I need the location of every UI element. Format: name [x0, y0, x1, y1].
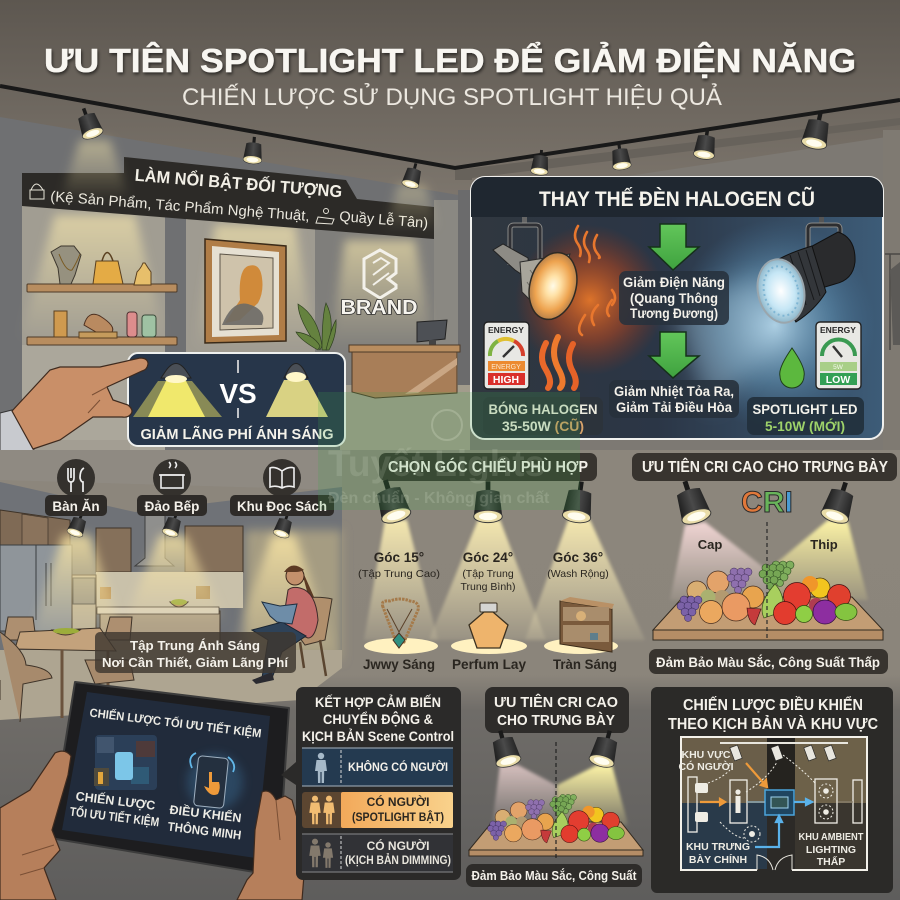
icon: display shelf [560, 597, 614, 652]
beam labels: (Tập Trung Cao) [358, 568, 440, 580]
panel: prioritise high CRI: Thip [810, 537, 838, 552]
energy card: high [484, 322, 529, 389]
floor plan labels: KHU TRƯNG [686, 841, 750, 853]
state: occupied, dimming: CÓ NGƯỜI [367, 838, 429, 853]
panel: reduce wasted light: GIẢM LÃNG PHÍ ÁNH SÁNG [140, 425, 334, 443]
tablet with saving strategy: CHIẾN LƯỢC TỐI ƯU TIẾT KIỆM [89, 705, 262, 741]
callout: reduced power: Giảm Điện Năng [623, 275, 725, 290]
callout: focus light where needed [95, 632, 296, 673]
floor plan labels: THẤP [817, 855, 845, 868]
title: ƯU TIÊN SPOTLIGHT LED ĐỂ GIẢM ĐIỆN NĂNG [44, 42, 856, 79]
icon: necklace [382, 599, 418, 648]
label: halogen bulb: BÓNG HALOGEN [488, 400, 598, 417]
energy card: low: ENERGY [820, 325, 856, 335]
plant [296, 303, 336, 350]
icon: LED spotlight [752, 217, 855, 327]
callout: reduced power [619, 271, 729, 325]
panel: control strategy by scene and zone: CHIẾN LƯỢC ĐIỀU KHIỂN [683, 696, 863, 714]
icon: reception bell [316, 208, 334, 224]
small display table [469, 822, 643, 856]
energy card: low: LOW [826, 374, 850, 386]
zone spot lamps [66, 511, 295, 540]
item captions: Tràn Sáng [553, 656, 617, 672]
spotlights [371, 476, 596, 526]
icon: smartphone control [187, 753, 243, 810]
banner: highlight objects: (Kệ Sản Phẩm, Tác Phẩm Nghệ Thuật, [50, 189, 310, 225]
watermark: Tuyết Lights [328, 443, 545, 484]
caption [466, 864, 642, 887]
framed artwork [205, 239, 286, 343]
wide beam lamp [133, 364, 222, 417]
beam labels [358, 550, 609, 593]
banner: highlight objects: LÀM NỔI BẬT ĐỐI TƯỢNG [134, 165, 343, 201]
reception desk [349, 320, 460, 398]
panel: control strategy by scene and zone [651, 687, 893, 893]
panel: replace old halogen lamps [471, 177, 883, 439]
tablet with saving strategy: THÔNG MINH [167, 819, 242, 842]
item captions: Perfum Lay [452, 656, 526, 672]
reader in chair [252, 565, 332, 684]
dining table and chairs [0, 617, 134, 722]
green arrow down: saves power [649, 224, 699, 270]
callout: focus light where needed: Tập Trung Ánh Sáng [130, 638, 260, 653]
panel: sensors and scene control: KỊCH BẢN Scene Control [302, 728, 454, 744]
icon: green drop [780, 348, 804, 388]
icon: strategy dashboard [94, 735, 157, 790]
icon: halogen lamp [493, 217, 584, 325]
kitchen furniture [0, 510, 243, 651]
floor plan labels: LIGHTING [806, 844, 856, 856]
floor plan labels: CÓ NGƯỜI [678, 760, 734, 773]
item captions [363, 656, 617, 672]
tablet with saving strategy: CHIẾN LƯỢC [75, 788, 156, 813]
floor plan labels: KHU AMBIENT [798, 831, 864, 843]
tablet with saving strategy [50, 682, 289, 876]
zone: dining table [45, 459, 107, 516]
caption [649, 649, 888, 674]
icon: store [30, 184, 44, 199]
shelves [27, 246, 177, 345]
state: occupied, spotlight on: (SPOTLIGHT BẬT) [352, 809, 444, 824]
callout: reduced heat [609, 380, 739, 418]
panel: choose beam angle: CHỌN GÓC CHIẾU PHÙ HỢP [388, 458, 588, 476]
flow arrows [700, 763, 853, 847]
panel: sensors and scene control: CHUYỂN ĐỘNG & [323, 710, 433, 727]
CRI badge: CRI [741, 486, 793, 519]
brand logo [340, 250, 418, 319]
tablet with saving strategy: TỐI ƯU TIẾT KIỆM [69, 804, 160, 829]
banner: highlight objects [22, 157, 434, 239]
callout: reduced heat: Giảm Tải Điều Hòa [616, 400, 732, 415]
icon: heat waves near lamp [575, 226, 615, 335]
display table [653, 597, 883, 640]
panel: reduce wasted light: VS [219, 378, 257, 409]
floor plan [681, 737, 867, 870]
track with ceiling spotlights [0, 86, 900, 232]
icon: perfume bottle [469, 603, 508, 648]
energy card: low [816, 322, 861, 389]
state: no one: KHÔNG CÓ NGƯỜI [348, 759, 448, 774]
watermark [318, 392, 580, 510]
caption: Đảm Bảo Màu Sắc, Công Suất [472, 868, 637, 883]
icon: big heat flames [542, 337, 576, 388]
panel: control strategy by scene and zone: THEO KỊCH BẢN VÀ KHU VỰC [668, 716, 878, 733]
icon: right hand [237, 791, 306, 900]
scene: kitchen and reading zones [0, 450, 342, 722]
beam labels: Góc 15° [374, 550, 424, 565]
panel: choose beam angle [358, 453, 645, 672]
panel: CRI display, smaller: CHO TRƯNG BÀY [497, 712, 615, 729]
callout: reduced heat: Giảm Nhiệt Tỏa Ra, [614, 384, 734, 399]
watermark: Đèn chuẩn - Không gian chất [328, 489, 550, 507]
zone: dining table: Bàn Ăn [52, 499, 100, 514]
state: occupied, spotlight on [302, 792, 453, 828]
panel: CRI display, smaller [466, 687, 643, 887]
zone: reading area: Khu Đọc Sách [237, 499, 327, 514]
item captions: Jwwy Sáng [363, 656, 435, 672]
banner: highlight objects: Quầy Lễ Tân) [339, 208, 429, 232]
label: halogen bulb [483, 397, 603, 435]
floor plan labels: KHU VỰC [682, 749, 731, 761]
label: LED spotlight: SPOTLIGHT LED [752, 401, 858, 417]
beam labels: (Tập Trung [462, 568, 514, 580]
panel: reduce wasted light [128, 353, 345, 446]
zone: kitchen island: Đảo Bếp [145, 499, 199, 514]
state: occupied, dimming: (KỊCH BẢN DIMMING) [345, 852, 451, 867]
zone: kitchen island [137, 459, 207, 516]
state: occupied, dimming [302, 834, 453, 872]
narrow beam lamp [266, 364, 328, 417]
icon: left hand [0, 751, 71, 900]
beam labels: Trung Bình) [460, 581, 516, 593]
floor plan labels: BÀY CHÍNH [689, 853, 747, 866]
state: no one [302, 748, 453, 786]
green arrow down: less heat [649, 332, 699, 378]
icon: pointing hand [0, 358, 148, 472]
energy card: high: ENERGY [491, 364, 521, 371]
subtitle: CHIẾN LƯỢC SỬ DỤNG SPOTLIGHT HIỆU QUẢ [182, 82, 722, 111]
beam labels: (Wash Rộng) [547, 568, 609, 580]
beam labels: Góc 36° [553, 550, 603, 565]
panel: prioritise high CRI: Cap [698, 537, 722, 552]
state: occupied, spotlight on: CÓ NGƯỜI [367, 794, 429, 809]
label: halogen bulb: 35-50W (CŨ) [502, 417, 584, 434]
beam labels: Góc 24° [463, 550, 513, 565]
label: LED spotlight [747, 397, 864, 435]
panel: prioritise high CRI [632, 453, 897, 674]
panel: sensors and scene control: KẾT HỢP CẢM BIẾN [315, 694, 441, 710]
label: LED spotlight: 5-10W (MỚI) [765, 417, 845, 434]
callout: reduced power: Tương Đương) [630, 306, 718, 321]
brand logo: BRAND [340, 297, 418, 319]
scene: product, art and brand wall [0, 117, 470, 452]
light pools [364, 638, 618, 654]
panel: sensors and scene control [281, 687, 461, 880]
callout: reduced power: (Quang Thông [630, 291, 718, 306]
panel: CRI display, smaller: ƯU TIÊN CRI CAO [494, 693, 618, 711]
clothes rack [885, 254, 900, 350]
panel title: THAY THẾ ĐÈN HALOGEN CŨ [539, 187, 815, 211]
energy card: low: 5W [833, 364, 844, 371]
callout: focus light where needed: Nơi Cần Thiết, Giảm Lãng Phí [102, 655, 288, 670]
zone: reading area [230, 459, 334, 516]
floor plan labels [678, 749, 864, 868]
energy card: high: ENERGY [488, 325, 524, 335]
caption: Đảm Bảo Màu Sắc, Công Suất Thấp [656, 653, 880, 670]
energy card: high: HIGH [493, 374, 519, 386]
tablet with saving strategy: ĐIỀU KHIỂN [169, 802, 242, 825]
